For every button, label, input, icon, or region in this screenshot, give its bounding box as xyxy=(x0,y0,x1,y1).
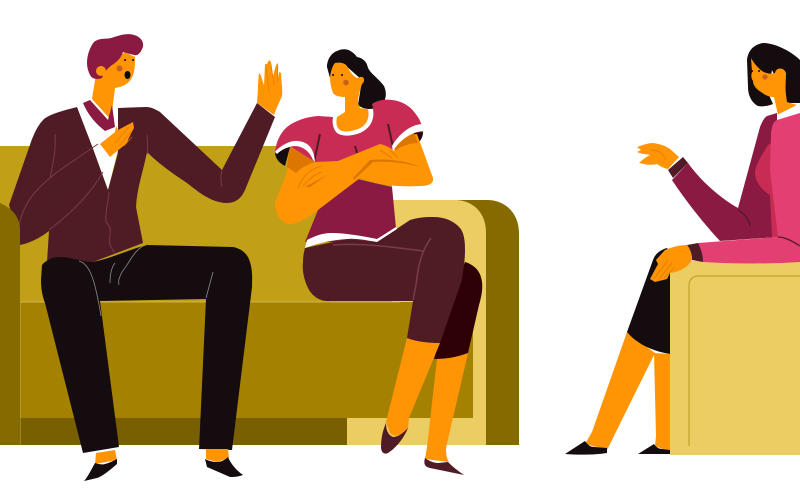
man: left ankle xyxy=(95,450,117,464)
seated woman: face and neck xyxy=(751,58,797,115)
man: raised hand xyxy=(257,60,282,115)
woman: forearm shadow xyxy=(305,159,420,187)
man: eyes xyxy=(125,59,133,61)
woman on sofa xyxy=(275,49,482,475)
woman: crossed arm finger lines xyxy=(298,150,398,188)
man: neck and face xyxy=(92,52,135,120)
woman: trouser seams xyxy=(333,238,431,300)
woman: upper arm shadows xyxy=(287,133,418,196)
man xyxy=(9,34,282,481)
seated woman: collar xyxy=(775,105,800,122)
seated woman: cuff on arm xyxy=(668,157,688,178)
man: shirt xyxy=(77,107,118,190)
man: mouth xyxy=(124,71,130,79)
seated woman xyxy=(565,43,800,455)
man: trouser creases xyxy=(79,245,213,316)
man: collar xyxy=(83,100,115,131)
seated woman: blouse and arm xyxy=(672,113,778,241)
woman: eyes xyxy=(333,74,342,76)
man: sleeve seams xyxy=(19,134,222,254)
woman: left sleeve underside xyxy=(275,147,290,166)
woman: hem xyxy=(305,227,397,248)
woman: sleeve trim left xyxy=(275,141,315,162)
seated woman: eye xyxy=(752,70,759,72)
woman: back shoe xyxy=(424,458,464,475)
woman: back leg trousers xyxy=(434,262,482,359)
seated woman: cheek xyxy=(762,74,768,80)
woman: lower shirt xyxy=(305,178,396,242)
seated woman: bust xyxy=(755,140,780,237)
woman: neckline trim xyxy=(333,109,373,136)
woman: front shoe xyxy=(381,423,408,454)
woman: upper shirt xyxy=(275,100,423,180)
seated woman: front shoe xyxy=(565,441,607,455)
man: hair xyxy=(87,34,143,79)
woman: face and neck xyxy=(330,63,372,135)
woman: trousers xyxy=(303,217,465,343)
seated woman: back shoe xyxy=(638,444,670,454)
woman: back leg xyxy=(425,353,468,462)
man: right shoe xyxy=(205,457,243,477)
man: trousers xyxy=(41,245,252,453)
seated woman: jacket xyxy=(770,113,800,240)
woman: shirt fold lines xyxy=(314,124,393,162)
woman: right sleeve underside xyxy=(413,132,423,143)
man: left shoe xyxy=(84,459,117,481)
seated woman: hand lines xyxy=(650,150,666,160)
seated woman: front leg xyxy=(585,332,655,450)
woman: front leg xyxy=(386,338,440,436)
man: chest hand xyxy=(100,122,134,157)
seated woman: elbow crease xyxy=(738,210,750,226)
sofa: left arm xyxy=(0,203,20,445)
man: chest hand finger lines xyxy=(115,127,132,146)
man: cardigan xyxy=(9,103,275,262)
seated woman: hand finger lines xyxy=(654,260,675,279)
seated woman: knee hand xyxy=(650,245,692,282)
seated woman: jacket seam xyxy=(778,237,800,246)
woman: cheek xyxy=(343,80,349,85)
man: right ankle xyxy=(206,449,229,462)
woman: arms xyxy=(275,134,433,224)
seated woman: back leg xyxy=(654,353,670,452)
seated woman: chair xyxy=(670,261,800,455)
seated woman: skirt xyxy=(627,248,680,354)
seated woman: hair back xyxy=(747,43,800,106)
man: raised hand finger lines xyxy=(266,64,278,92)
woman: sleeve trim right xyxy=(392,124,423,151)
sofa xyxy=(0,146,519,445)
seated woman: cuff on knee xyxy=(687,243,703,262)
woman: hair xyxy=(327,49,386,109)
seated woman: chair inset line xyxy=(689,276,800,446)
seated woman: raised hand xyxy=(637,143,679,169)
man: ear xyxy=(96,66,106,76)
man: cheek xyxy=(116,66,122,72)
seated woman: thigh sleeve xyxy=(698,235,800,264)
